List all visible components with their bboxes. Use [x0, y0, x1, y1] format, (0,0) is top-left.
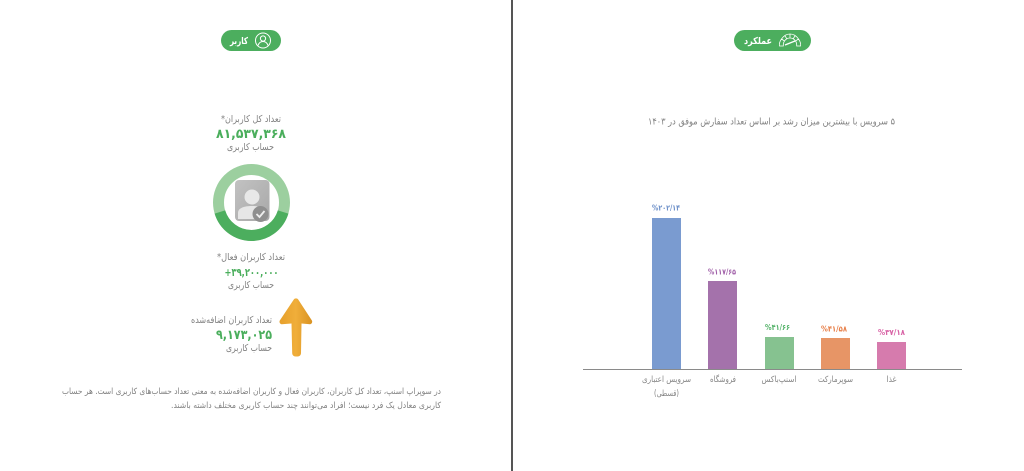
stat: total users: ۸۱,۵۳۷,۳۶۸: [216, 127, 286, 142]
explanatory note: در سوپراپ اسنپ، تعداد کل کاربران، کاربران فعال و کاربران اضافه‌شده به معنی تعداد حساب‌های کاربری است. هر حساب: [62, 387, 441, 397]
stat: added users: [191, 315, 272, 354]
bar: food: %۳۷/۱۸: [878, 328, 905, 337]
heading pill: performance: [734, 30, 811, 51]
bar: credit service: %۲۰۲/۱۴: [652, 204, 680, 212]
heading pill: users: [221, 30, 281, 51]
explanatory note: کاربری معادل یک فرد نیست؛ افراد می‌توانند چند حساب کاربری مختلف داشته باشند.: [171, 401, 442, 411]
bar: SnappBox: [762, 323, 796, 385]
bar: SnappBox: اسنپ‌باکس: [762, 375, 796, 385]
bar: supermarket: سوپرمارکت: [818, 375, 853, 385]
bar: food: غذا: [886, 375, 897, 385]
bar: credit service: سرویس اعتباری: [642, 375, 691, 385]
stat: active users: حساب کاربری: [228, 280, 274, 291]
stat: added users: حساب کاربری: [226, 343, 272, 354]
stat: active users: +۳۹,۲۰۰,۰۰۰: [224, 266, 278, 279]
panel: performance: [583, 30, 962, 399]
stat: added users: تعداد کاربران اضافه‌شده: [191, 315, 272, 326]
explanatory note: [62, 387, 442, 411]
bar: store: [708, 268, 737, 385]
stat: total users: [216, 114, 286, 153]
heading pill: performance: عملکرد: [744, 36, 772, 47]
stat: active users: [217, 252, 285, 291]
heading pill: users: کاربر: [229, 36, 248, 47]
bar: food: [877, 328, 906, 385]
stat: total users: تعداد کل کاربران*: [221, 114, 281, 125]
bar: credit service: [642, 204, 691, 399]
stat: total users: حساب کاربری: [227, 142, 274, 153]
ring chart: active users share: [218, 170, 284, 236]
bar: store: فروشگاه: [710, 374, 736, 385]
center divider: [511, 0, 513, 471]
bar chart: [583, 204, 962, 399]
stat: active users: تعداد کاربران فعال*: [217, 252, 285, 263]
icon: user profile with check: [235, 180, 270, 222]
panel: users: [62, 30, 442, 411]
bar: supermarket: [818, 324, 853, 385]
bar: supermarket: %۴۱/۵۸: [821, 324, 847, 334]
stat: added users: ۹,۱۷۳,۰۲۵: [216, 328, 272, 343]
axis line: [583, 369, 962, 370]
chart title: ۵ سرویس با بیشترین میزان رشد بر اساس تعداد سفارش موفق در ۱۴۰۳: [648, 116, 895, 128]
bar: SnappBox: %۴۱/۶۶: [765, 323, 790, 332]
bar: store: %۱۱۷/۶۵: [708, 268, 736, 276]
bar: credit service: (قسطی): [654, 389, 679, 399]
icon: up arrow: [280, 298, 312, 356]
